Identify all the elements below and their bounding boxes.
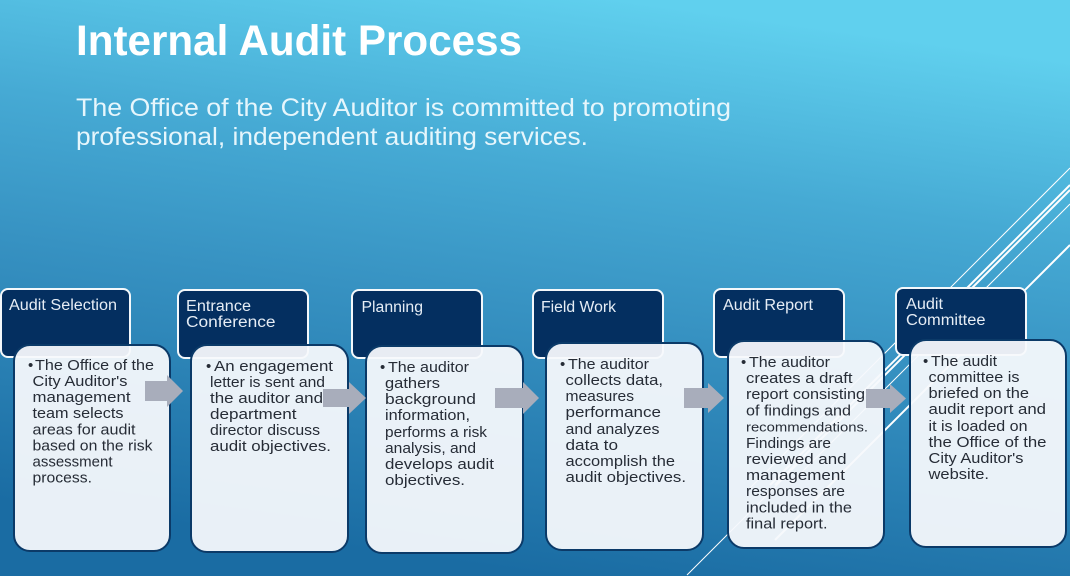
body: Field Work: audit objectives. (566, 469, 686, 486)
step 4: Field Work (533, 290, 703, 550)
step 1: Audit Selection (1, 289, 170, 551)
step 2: Entrance Conference (178, 290, 348, 552)
body: Audit Report: of findings and (746, 402, 851, 419)
header: Entrance Conference: Conference (186, 314, 276, 331)
body: Audit Committee: it is loaded on (928, 418, 1028, 435)
body: Entrance Conference (191, 345, 348, 552)
body: Audit Selection: team selects (32, 405, 124, 422)
body: Audit Committee (910, 340, 1066, 547)
step 6: Audit Committee (896, 288, 1066, 547)
body: Audit Committee: City Auditor's (928, 450, 1024, 467)
body: Field Work: and analyzes (566, 421, 660, 438)
body: Planning: performs a risk (385, 424, 488, 441)
body: Field Work: collects data, (566, 372, 663, 389)
body: Entrance Conference: • (206, 358, 211, 375)
body: Audit Report: responses are (746, 483, 845, 500)
step 3: Planning (352, 290, 523, 553)
subtitle: professional, independent auditing services. (76, 123, 588, 151)
body: Audit Committee: audit report and (928, 401, 1046, 418)
body: Field Work: measures (566, 388, 634, 405)
body: Audit Report: reviewed and (746, 451, 846, 468)
body: Field Work: accomplish the (566, 453, 675, 470)
body: Field Work: The auditor (568, 356, 649, 373)
header: Audit Committee (896, 288, 1026, 355)
header: Audit Selection (1, 289, 130, 357)
body: Field Work (546, 343, 703, 550)
body: Planning: The auditor (388, 359, 469, 376)
body: Planning: gathers (385, 375, 440, 392)
body: Audit Report: recommendations. (746, 421, 868, 435)
body: Entrance Conference: audit objectives. (210, 438, 331, 455)
subtitle (76, 94, 731, 151)
body: Planning: background (385, 391, 476, 408)
body: Planning: objectives. (385, 472, 465, 489)
body: Audit Report: creates a draft (746, 370, 853, 387)
body: Field Work: performance (566, 404, 661, 421)
body: Planning: analysis, and (385, 440, 476, 457)
body: Audit Selection: process. (32, 470, 92, 487)
body: Audit Selection (14, 345, 170, 551)
body: Audit Committee: The audit (931, 353, 998, 370)
header: Audit Committee: Committee (906, 312, 986, 329)
body: Audit Selection: management (32, 389, 131, 406)
header: Audit Report: Audit Report (723, 297, 814, 314)
body: Entrance Conference: letter is sent and (210, 374, 325, 391)
body: Audit Report: final report. (746, 516, 828, 533)
body: Audit Report: included in the (746, 500, 852, 517)
header: Audit Committee: Audit (906, 296, 944, 313)
body: Field Work: data to (566, 437, 618, 454)
body: Field Work: • (560, 356, 565, 373)
header: Audit Selection: Audit Selection (9, 297, 117, 314)
body: Audit Report: management (746, 467, 846, 484)
arrow: step 3 to 4 (495, 382, 539, 414)
body: Audit Committee: • (923, 353, 928, 370)
body: Entrance Conference: department (210, 406, 297, 423)
body: Audit Committee: committee is (928, 369, 1020, 386)
body: Audit Selection: The Office of the (35, 357, 154, 374)
header: Field Work: Field Work (541, 299, 616, 316)
header: Entrance Conference (178, 290, 308, 358)
body: Audit Committee: briefed on the (928, 385, 1029, 402)
body: Planning (366, 346, 523, 553)
body: Audit Report: Findings are (746, 435, 831, 452)
body: Audit Committee: the Office of the (928, 434, 1046, 451)
body: Audit Report: • (741, 354, 746, 371)
body: Audit Selection: based on the risk (32, 438, 153, 455)
body: Audit Selection: City Auditor's (32, 373, 128, 390)
body: Audit Selection: areas for audit (32, 422, 136, 439)
subtitle: The Office of the City Auditor is committed to promoting (76, 94, 731, 122)
body: Audit Selection: • (28, 357, 33, 374)
body: Planning: • (380, 359, 385, 376)
header: Audit Report (714, 289, 844, 357)
body: Entrance Conference: the auditor and (210, 390, 323, 407)
title: Internal Audit Process (76, 17, 522, 65)
body: Audit Report (728, 341, 884, 548)
arrow: step 4 to 5 (684, 383, 724, 413)
body: Entrance Conference: An engagement (214, 358, 334, 375)
step 5: Audit Report (714, 289, 884, 548)
decorative diagonal lines (687, 168, 1070, 575)
arrow: step 1 to 2 (145, 375, 183, 407)
header: Planning: Planning (362, 299, 423, 316)
arrow: step 2 to 3 (323, 382, 366, 414)
arrow: step 5 to 6 (866, 384, 906, 413)
body: Entrance Conference: director discuss (210, 422, 320, 439)
header: Field Work (533, 290, 663, 358)
body: Audit Committee: website. (927, 466, 989, 483)
body: Audit Report: report consisting (746, 386, 865, 403)
header: Planning (352, 290, 482, 358)
body: Planning: develops audit (385, 456, 495, 473)
header: Entrance Conference: Entrance (186, 298, 251, 315)
body: Audit Selection: assessment (32, 454, 113, 471)
body: Planning: information, (385, 407, 470, 424)
body: Audit Report: The auditor (749, 354, 830, 371)
